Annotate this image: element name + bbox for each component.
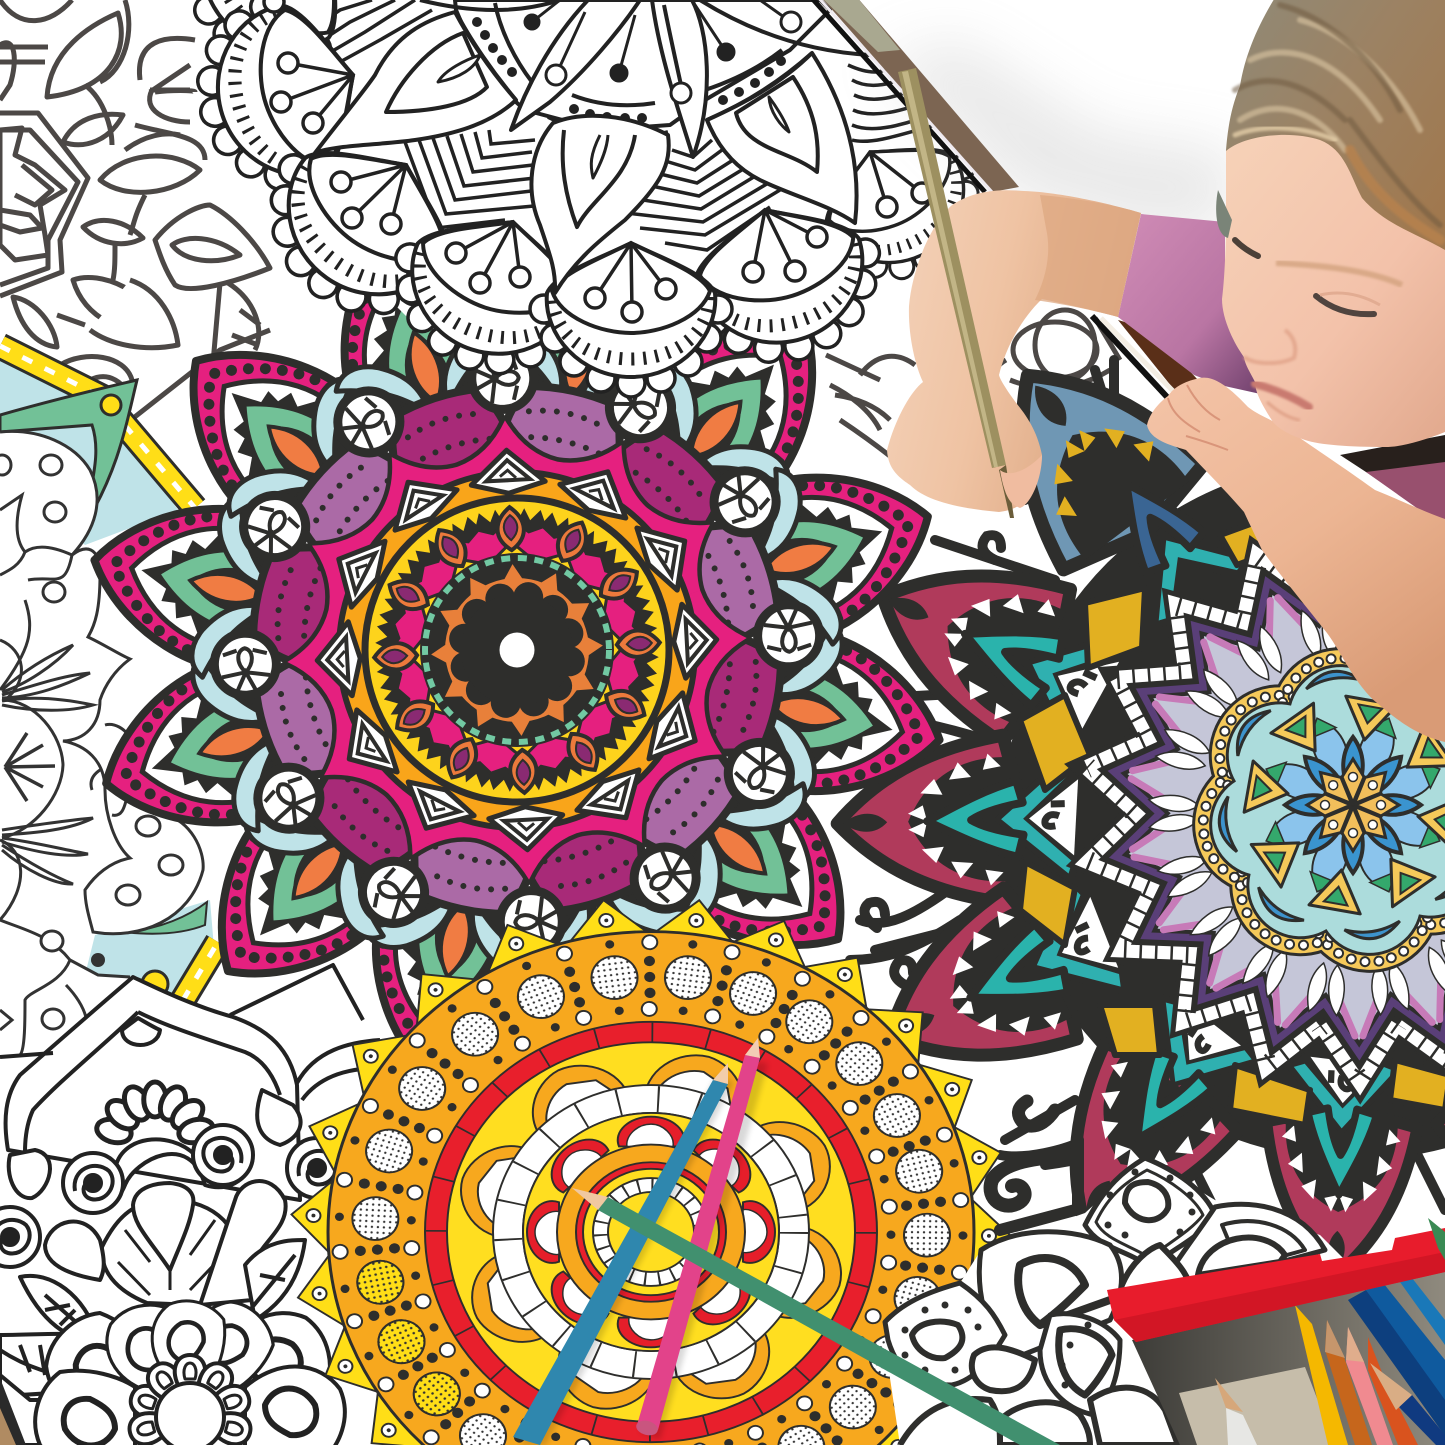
brow <box>1276 263 1402 285</box>
yellow and orange mandala <box>289 895 1012 1445</box>
maroon outer petals <box>835 323 1445 1279</box>
purple and magenta dotted band <box>245 378 789 922</box>
top black-and-white mandala <box>146 0 1009 400</box>
finger creases <box>1168 385 1228 450</box>
leaves and drops <box>102 1200 239 1305</box>
bottom-left line mandala <box>0 965 380 1445</box>
bottom-right line mandala <box>885 1158 1345 1445</box>
hair <box>1226 0 1445 260</box>
large teardrop petals <box>315 12 857 293</box>
canopy <box>6 977 300 1200</box>
pink star <box>285 418 749 882</box>
inner swirl and red details <box>448 1043 854 1421</box>
pink marks and white leaves <box>1129 584 1445 1036</box>
yellow, pink and orange centre <box>365 498 669 802</box>
outer pink petals <box>75 208 959 1092</box>
orange ring with dotted circles <box>328 932 974 1445</box>
thick black swirl right of yellow mandala <box>991 1140 1078 1230</box>
central flower <box>31 1290 347 1445</box>
gold scalloped ring <box>1181 636 1445 984</box>
wooden table edge <box>810 0 1198 398</box>
orange ring and white triangles <box>315 448 719 852</box>
mat corner bottom-left <box>0 1378 26 1445</box>
teal chevrons <box>926 451 1445 1197</box>
thin upper petals and dotted strips <box>420 0 870 157</box>
grey line mandala behind the child <box>826 310 1120 460</box>
blue pencil <box>513 1063 734 1445</box>
white surface above the mat with soft shadow <box>826 0 1445 640</box>
green pencil <box>572 1188 1060 1445</box>
eye right <box>1316 296 1374 314</box>
pink pencil <box>635 1038 768 1440</box>
yellow spikes <box>289 895 1012 1445</box>
red ring <box>425 1022 877 1442</box>
scalloped lobes with stems <box>146 0 1009 400</box>
left mandala with yellow ring <box>0 346 218 1055</box>
blue centre flower <box>1215 667 1445 943</box>
pencils in the box <box>1215 1278 1445 1445</box>
crayon box <box>1107 1218 1445 1445</box>
eye left and temple shadow <box>1216 190 1232 238</box>
raised arm and hand <box>887 190 1141 512</box>
face <box>1222 135 1445 447</box>
black vines and white patches <box>845 360 1445 1240</box>
hair strands <box>1235 5 1440 240</box>
forearm and resting hand <box>1147 378 1445 742</box>
fingers over pencil <box>1000 455 1042 508</box>
black base disc <box>1005 460 1445 1160</box>
grey line mandala top-left <box>0 0 270 423</box>
pink mandala <box>75 208 959 1092</box>
golden pencil <box>898 68 1014 518</box>
white flower circles <box>213 346 821 954</box>
fan <box>94 1082 216 1146</box>
yellow blocks <box>1020 515 1445 1125</box>
nose and mouth <box>1244 330 1295 363</box>
zigzag stripe fields <box>296 0 940 250</box>
shirt below chin <box>1340 435 1445 525</box>
blue and teal mandala <box>835 323 1445 1279</box>
white checker ribbon star <box>1024 483 1445 1137</box>
shirt sleeve <box>1118 214 1265 395</box>
child <box>887 0 1445 742</box>
